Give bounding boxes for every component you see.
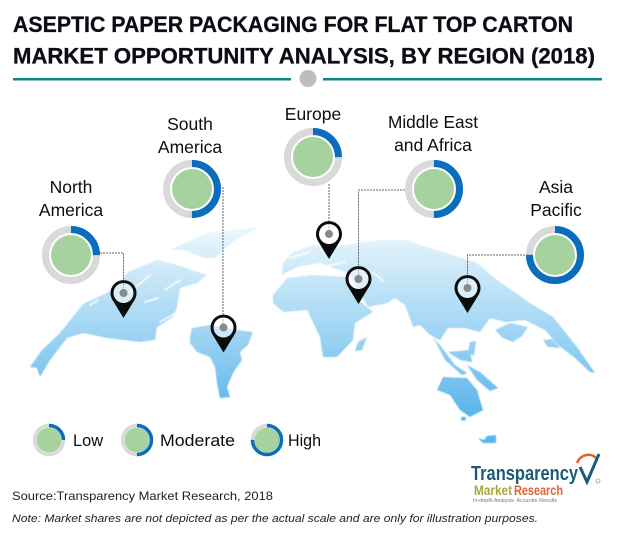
continent: South America [190, 325, 253, 398]
note text: Note: Market shares are not depicted as per the actual scale and are only for illustration purposes. [12, 513, 538, 525]
logo: Transparency Market Research: Market [474, 483, 512, 498]
pin: Asia Pacific [454, 275, 480, 313]
region: Middle East and Africa: and Africa [394, 135, 472, 155]
region: Asia Pacific [530, 177, 582, 280]
legend item: High: High [288, 431, 321, 450]
logo check mark [577, 454, 600, 483]
region: South America: America [158, 137, 222, 157]
pin: Middle East and Africa [346, 266, 372, 304]
continent: Australia [437, 377, 483, 421]
landmass: Antarctic fragment [478, 435, 496, 443]
region: North America [39, 177, 103, 280]
title: MARKET OPPORTUNITY ANALYSIS, BY REGION (2018) [13, 44, 595, 68]
pin: South America [210, 315, 236, 352]
title [13, 12, 595, 68]
continent: Africa [273, 275, 373, 357]
region: Middle East and Africa: Middle East [388, 112, 478, 132]
continent: Eurasia [282, 240, 595, 373]
region: South America [158, 114, 222, 214]
legend [34, 426, 321, 454]
legend item: Low [34, 426, 104, 454]
region: South America: South [167, 114, 213, 134]
title: ASEPTIC PAPER PACKAGING FOR FLAT TOP CARTON [13, 12, 573, 37]
map coastline gaps [90, 252, 383, 330]
region: Asia Pacific: Asia [539, 177, 573, 197]
logo: Transparency Market Research: Transparency [471, 463, 579, 485]
legend item: Low: Low [73, 431, 104, 450]
world map [30, 227, 595, 443]
region: North America: North [50, 177, 92, 197]
logo: Transparency Market Research: Research [514, 483, 563, 498]
region: Middle East and Africa [388, 112, 478, 214]
continent: North America [30, 260, 207, 377]
leader lines [100, 184, 528, 327]
region: Europe: Europe [285, 104, 341, 124]
pin: North America [110, 280, 136, 318]
region: Europe [285, 104, 341, 182]
legend item: Moderate [122, 426, 235, 454]
legend item: Moderate: Moderate [160, 431, 235, 450]
title divider [13, 70, 602, 87]
logo: Transparency Market Research [471, 454, 600, 504]
continent: Greenland [170, 227, 260, 258]
logo: Transparency Market Research: In-depth Analysis. Accurate Results [473, 498, 558, 504]
legend item: High [252, 426, 321, 454]
source text: Source:Transparency Market Research, 2018 [12, 489, 273, 503]
region: North America: America [39, 200, 103, 220]
island: Madagascar [355, 337, 367, 351]
pin: Europe [316, 221, 342, 259]
region: Asia Pacific: Pacific [530, 200, 582, 220]
islands: Japan and Southeast Asia [433, 323, 560, 391]
